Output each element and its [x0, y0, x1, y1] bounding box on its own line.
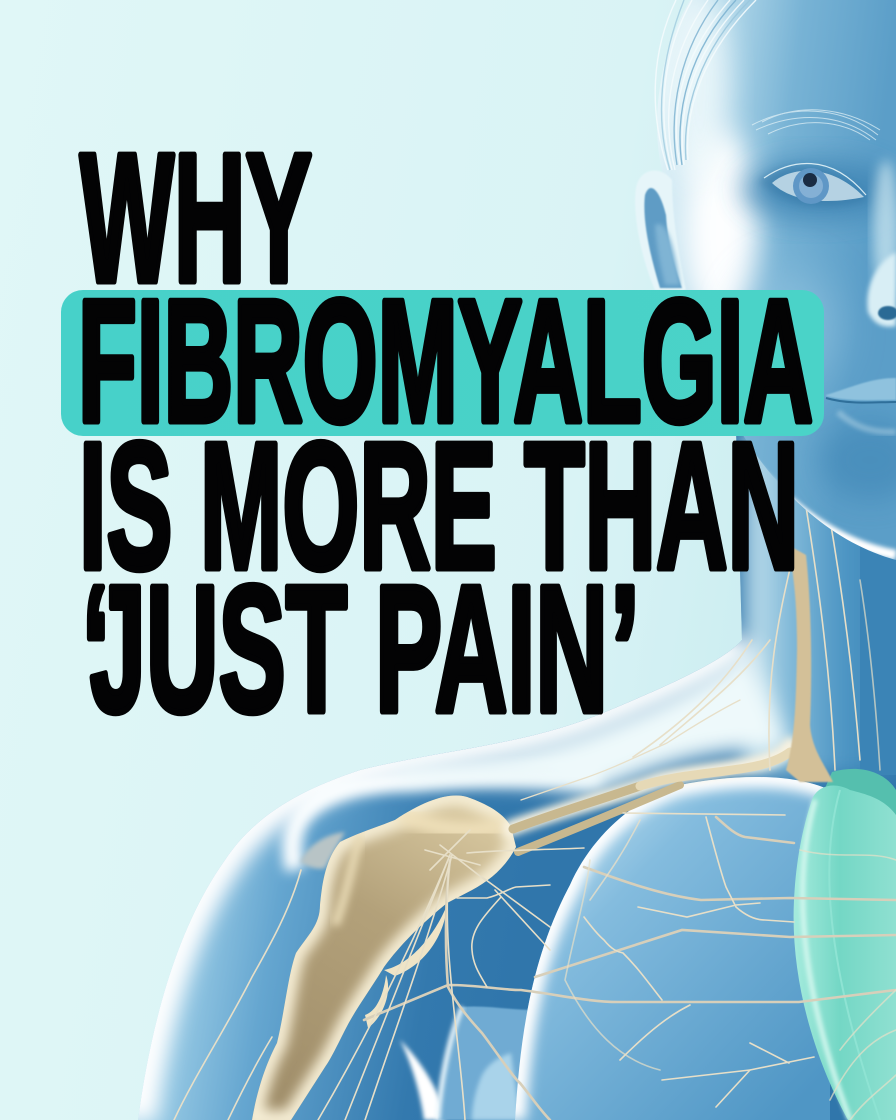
hair — [655, 0, 756, 170]
closing quote: ’ — [610, 549, 640, 750]
white glow spike — [400, 1040, 446, 1120]
opening quote: ‘ — [82, 549, 110, 750]
eyebrow — [752, 110, 880, 140]
line: WHY: WHY — [80, 115, 312, 320]
highlight pill — [61, 290, 824, 436]
deltoid muscle — [252, 796, 516, 1120]
clavicle nerve bundle — [511, 745, 790, 852]
chest lobe — [515, 777, 830, 1120]
eye — [758, 163, 868, 207]
translucent shoulder lobe — [300, 832, 345, 869]
ear — [635, 171, 686, 290]
lips — [826, 378, 896, 432]
title — [78, 115, 813, 750]
illustration: torso and nerves — [130, 430, 896, 1120]
illustration: face — [635, 0, 896, 570]
lung — [794, 769, 896, 1120]
nose — [867, 252, 896, 327]
small muscle — [384, 905, 447, 976]
neck nerve trunk — [786, 545, 833, 782]
face shape — [640, 0, 896, 570]
nerves — [174, 470, 896, 1120]
torso body — [130, 430, 896, 1120]
lower lobes — [438, 1007, 535, 1120]
